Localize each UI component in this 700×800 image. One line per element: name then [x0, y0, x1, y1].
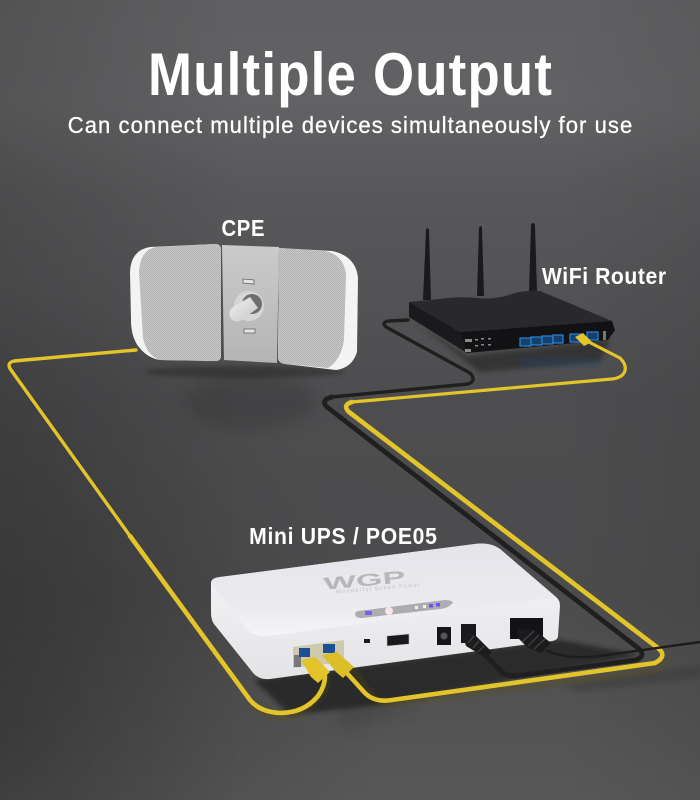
power cord [546, 642, 700, 657]
UPS indicator panel [355, 600, 453, 618]
black AC plug [518, 628, 551, 653]
title: Multiple Output [148, 41, 552, 108]
UPS indicator lights [365, 603, 440, 615]
UPS RJ45 bay [293, 640, 344, 668]
router top [409, 291, 612, 332]
CPE right panel [278, 248, 358, 370]
router antennas [423, 223, 537, 300]
icon: Mini UPS device [211, 544, 560, 679]
router USB port [603, 331, 606, 340]
UPS AC port [510, 618, 543, 639]
UPS switch [364, 639, 370, 643]
yellow cable from router to UPS [346, 339, 668, 704]
black ethernet cable [324, 320, 642, 676]
yellow plug left [301, 657, 330, 683]
black DC plug [462, 630, 492, 658]
label: WiFi Router: WiFi Router [542, 263, 666, 289]
router front [460, 321, 615, 353]
floor reflections [145, 322, 700, 730]
UPS tagline: Wonderful Green Power [336, 582, 420, 596]
CPE bottom slot [244, 329, 255, 333]
label: CPE: CPE [221, 215, 265, 241]
UPS DC port [437, 627, 451, 645]
icon: WiFi router [409, 223, 615, 367]
CPE center plate [222, 245, 279, 363]
UPS USB port [387, 634, 409, 646]
CPE top slot [243, 279, 254, 284]
label: Mini UPS / POE05: Mini UPS / POE05 [249, 523, 437, 549]
CPE mount knob [229, 291, 264, 322]
yellow plug right [322, 652, 354, 678]
UPS top face [211, 544, 556, 636]
UPS RJ45 left dark gap [294, 655, 301, 667]
icon: CPE antenna [130, 244, 358, 370]
subtitle: Can connect multiple devices simultaneously for use [68, 113, 632, 138]
UPS body [211, 544, 560, 679]
CPE left panel [130, 244, 221, 361]
UPS logo: WGP [323, 567, 406, 594]
UPS RJ45 blue jacks [299, 644, 335, 657]
router LEDs [465, 338, 491, 352]
UPS output port [461, 624, 476, 643]
router port reflection [520, 358, 600, 367]
yellow cable from CPE to UPS [9, 350, 327, 717]
router yellow plug [575, 333, 592, 346]
router LAN ports [520, 332, 598, 346]
router left side [409, 302, 467, 353]
